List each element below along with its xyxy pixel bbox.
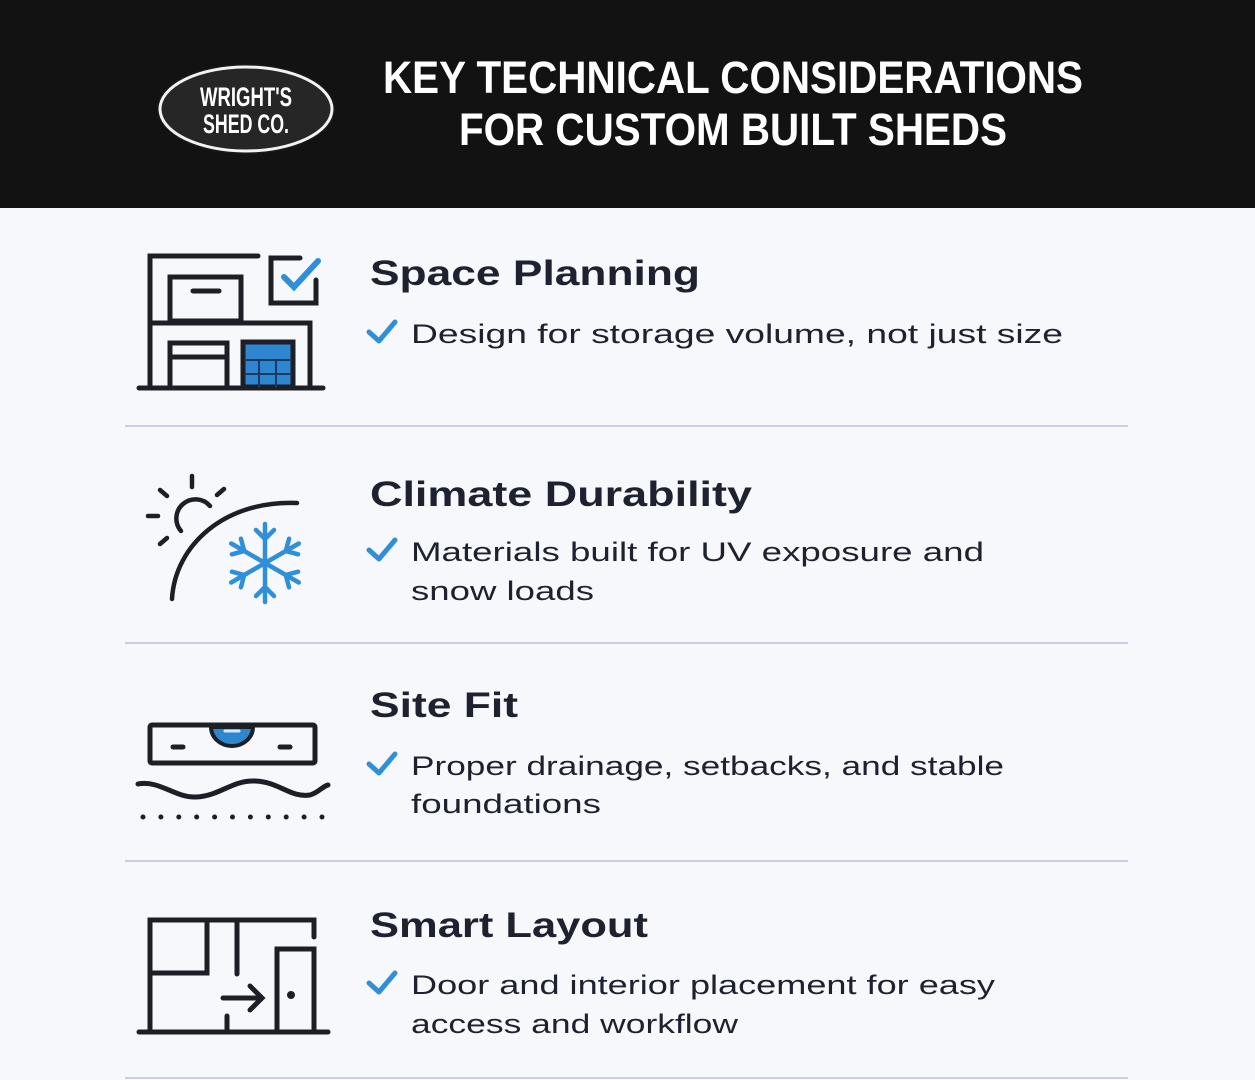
heading: Site Fit	[370, 686, 518, 725]
panel: climate durability	[148, 475, 984, 606]
body text: Materials built for UV exposure and	[411, 537, 984, 567]
header bar	[0, 0, 1255, 208]
body text: Door and interior placement for easy	[411, 970, 996, 1000]
panel: site fit	[138, 686, 1004, 819]
heading: Space Planning	[370, 254, 700, 293]
body text: Proper drainage, setbacks, and stable	[411, 751, 1004, 781]
title: FOR CUSTOM BUILT SHEDS	[459, 104, 1007, 155]
title: KEY TECHNICAL CONSIDERATIONS	[383, 52, 1083, 103]
body text: access and workflow	[411, 1009, 739, 1039]
logo: WRIGHT'S	[200, 82, 292, 112]
checkmark	[369, 540, 395, 559]
logo	[157, 64, 335, 154]
panel: smart layout	[139, 906, 996, 1039]
body text: snow loads	[411, 576, 594, 606]
checkmark	[369, 322, 395, 341]
icon: sun and snowflake	[148, 476, 303, 602]
logo: SHED CO.	[203, 109, 289, 139]
checkmark	[369, 754, 395, 773]
icon: level and ground	[138, 725, 328, 817]
checkmark	[369, 973, 395, 992]
icon: floor plan with door	[139, 920, 328, 1032]
body text: Design for storage volume, not just size	[411, 319, 1063, 349]
heading: Climate Durability	[370, 475, 753, 514]
heading: Smart Layout	[370, 906, 648, 945]
title	[383, 52, 1083, 155]
panel: space planning	[139, 254, 1063, 388]
icon: shed floor plan	[139, 256, 323, 388]
body text: foundations	[411, 789, 601, 819]
